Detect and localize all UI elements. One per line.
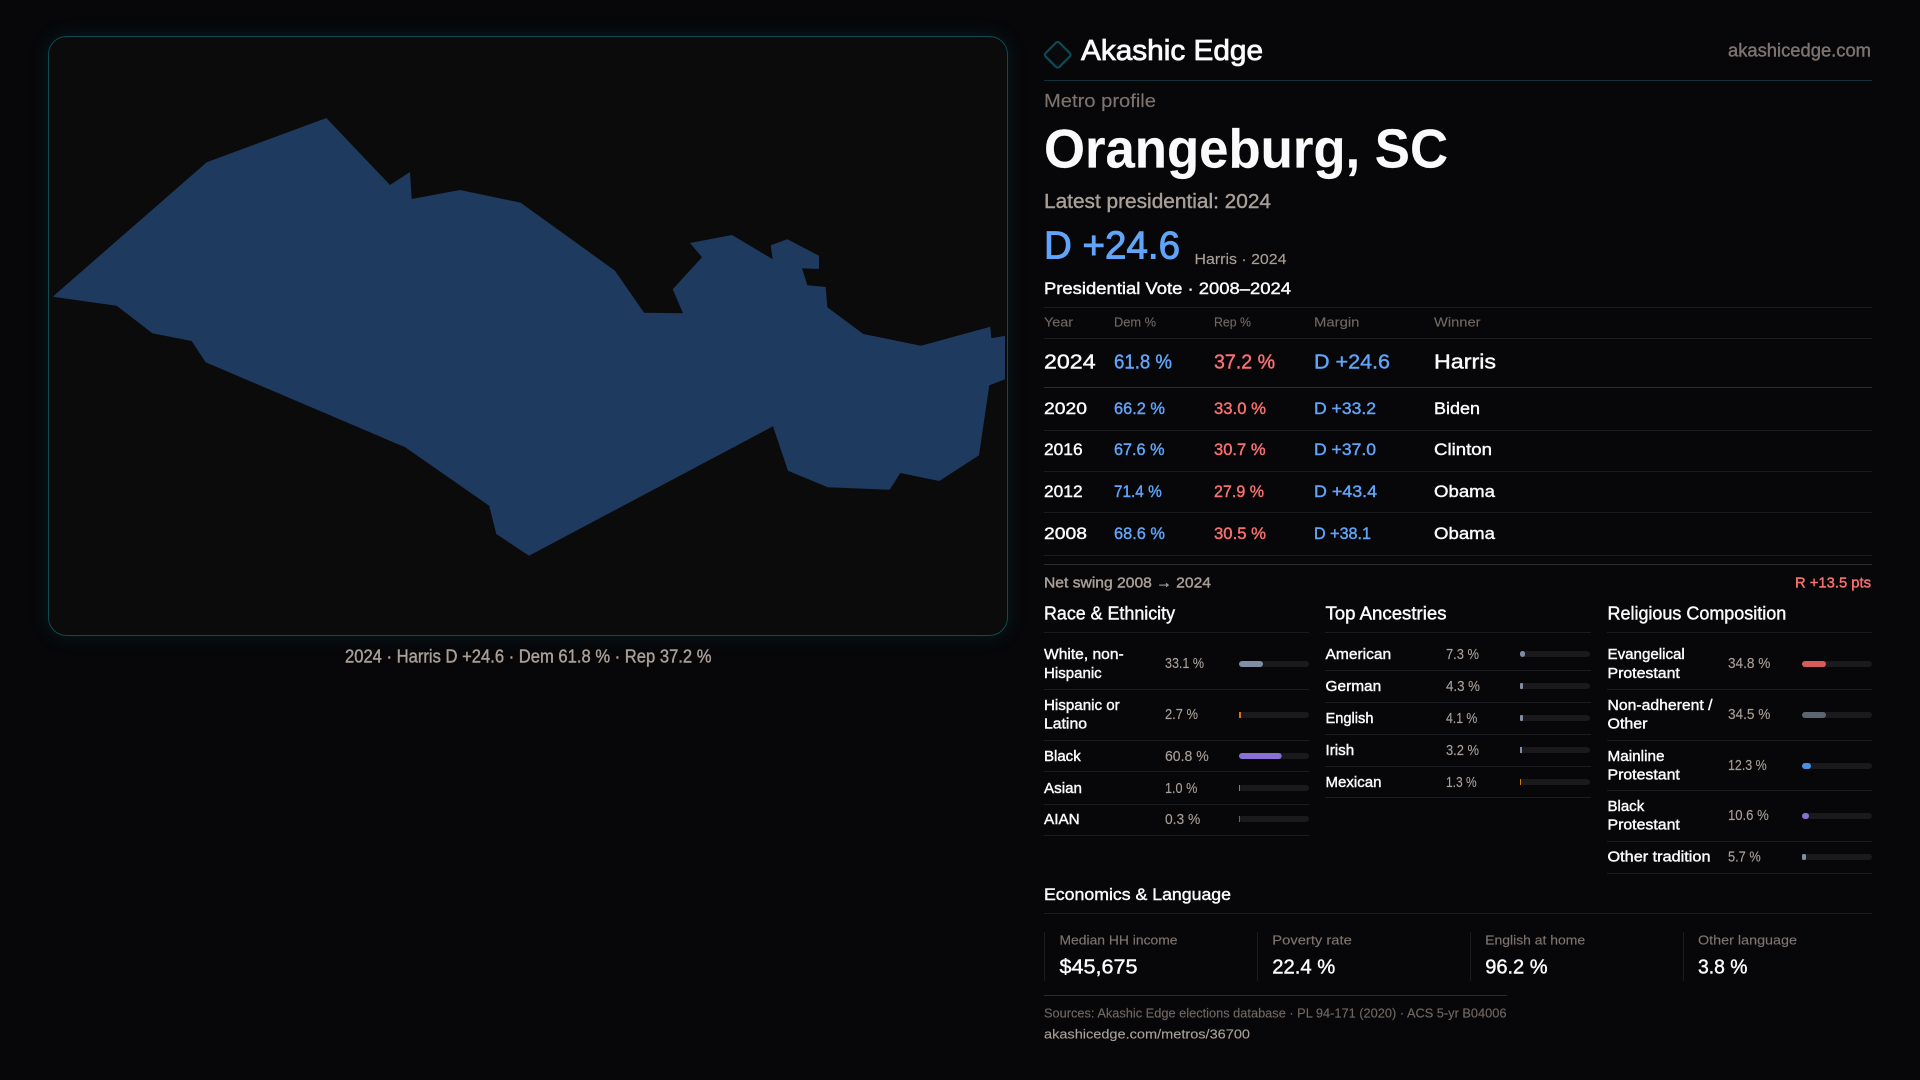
stat: median household income: $45,675 — [1060, 956, 1138, 978]
table: presidential vote — [1044, 307, 1872, 556]
row 2012: 71.4 % — [1114, 482, 1162, 501]
row 2024: Harris — [1434, 351, 1496, 373]
row: Mexican — [1326, 774, 1590, 791]
row: Evangelical Protestant: Protestant — [1608, 665, 1681, 682]
row 2008: 30.5 % — [1214, 524, 1266, 543]
panel: economics and language — [1044, 885, 1872, 981]
row: Non-adherent / Other: Other — [1608, 716, 1648, 733]
row: Hispanic or Latino: Hispanic or — [1044, 697, 1120, 714]
heading: Race & Ethnicity — [1044, 603, 1175, 623]
row: Mainline Protestant: Protestant — [1608, 767, 1681, 784]
row: Irish: Irish — [1326, 742, 1354, 759]
heading: Economics & Language — [1044, 885, 1231, 904]
table heading: Presidential Vote · 2008–2024 — [1044, 279, 1291, 298]
row: Mainline Protestant: Mainline — [1608, 748, 1664, 765]
row 2012: D +43.4 — [1314, 482, 1377, 501]
row 2020 — [1044, 399, 1480, 418]
row: Hispanic or Latino — [1044, 697, 1309, 733]
stat: English at home: 96.2 % — [1485, 956, 1548, 978]
row 2020: 66.2 % — [1114, 399, 1165, 418]
row 2016: 2016 — [1044, 440, 1083, 459]
row: German — [1326, 678, 1590, 695]
row 2012: Obama — [1434, 482, 1496, 501]
heading: Religious Composition — [1608, 603, 1786, 623]
row: English: English — [1326, 710, 1374, 727]
stat: English at home — [1470, 932, 1585, 981]
row: German: German — [1326, 678, 1381, 695]
row 2016 — [1044, 440, 1492, 459]
title: Orangeburg, SC — [1044, 118, 1448, 180]
row 2024: 37.2 % — [1214, 351, 1275, 373]
footer: sources: akashicedge.com/metros/36700 — [1044, 1026, 1250, 1041]
row: Non-adherent / Other: Non-adherent / — [1608, 697, 1713, 714]
row: Hispanic or Latino: 2.7 % — [1165, 706, 1198, 723]
stat: poverty rate: Poverty rate — [1272, 933, 1352, 948]
brand url: akashicedge.com — [1728, 40, 1871, 60]
brand name: Akashic Edge — [1081, 35, 1263, 67]
row 2008: 68.6 % — [1114, 524, 1165, 543]
row: Black Protestant: Protestant — [1608, 817, 1681, 834]
row: Black Protestant — [1608, 798, 1872, 834]
row 2020: D +33.2 — [1314, 399, 1376, 418]
row: Hispanic or Latino: Latino — [1044, 716, 1087, 733]
row: Irish: 3.2 % — [1446, 742, 1479, 759]
table header row: Dem % — [1114, 315, 1156, 330]
row: Irish — [1326, 742, 1590, 759]
net swing row: R +13.5 pts — [1795, 574, 1871, 591]
row: English: 4.1 % — [1446, 710, 1477, 727]
stat: other language: 3.8 % — [1698, 956, 1748, 978]
row: American: American — [1326, 646, 1391, 663]
net swing row: Net swing 2008 → 2024 — [1044, 574, 1211, 591]
row 2008: 2008 — [1044, 524, 1087, 543]
row: AIAN: 0.3 % — [1165, 811, 1200, 828]
row: Asian — [1044, 780, 1309, 797]
row 2024: 2024 — [1044, 351, 1096, 373]
row 2008: Obama — [1434, 524, 1496, 543]
headline margin: D +24.6 — [1044, 225, 1180, 268]
row: Evangelical Protestant: 34.8 % — [1728, 655, 1770, 672]
row 2012 — [1044, 482, 1496, 501]
stat: median household income — [1044, 932, 1178, 981]
row 2024: 61.8 % — [1114, 351, 1172, 373]
map caption: 2024 · Harris D +24.6 · Dem 61.8 % · Rep 37.2 % — [345, 646, 712, 666]
net swing row — [1044, 574, 1871, 591]
stat: other language — [1683, 932, 1797, 981]
panel: top ancestries — [1325, 603, 1591, 798]
row: Black Protestant: Black — [1608, 798, 1645, 815]
row 2020: 2020 — [1044, 399, 1087, 418]
row: Black: Black — [1044, 748, 1081, 765]
headline note: Harris · 2024 — [1194, 251, 1286, 268]
table header row — [1044, 315, 1481, 330]
panel: race and ethnicity — [1044, 603, 1309, 836]
row: Other tradition: 5.7 % — [1728, 849, 1761, 866]
row: American — [1326, 646, 1590, 663]
row: Evangelical Protestant — [1608, 646, 1872, 682]
row 2016: 67.6 % — [1114, 440, 1164, 459]
row: Evangelical Protestant: Evangelical — [1608, 646, 1685, 663]
table header row: Winner — [1434, 315, 1481, 330]
subtitle: latest presidential: Latest presidential: 2024 — [1044, 191, 1271, 213]
stat: poverty rate — [1257, 932, 1352, 981]
row: AIAN: AIAN — [1044, 811, 1080, 828]
heading: Top Ancestries — [1326, 603, 1446, 623]
row: Black — [1044, 748, 1309, 765]
panel: religious composition — [1607, 603, 1872, 874]
row: AIAN — [1044, 811, 1309, 828]
row: Mexican: Mexican — [1326, 774, 1382, 791]
row: Other tradition — [1608, 849, 1872, 866]
headline margin — [1044, 225, 1286, 268]
row: Non-adherent / Other: 34.5 % — [1728, 706, 1770, 723]
row 2024 — [1044, 351, 1496, 373]
stat: English at home: English at home — [1485, 933, 1585, 948]
stat: other language: Other language — [1698, 933, 1797, 948]
row 2016: Clinton — [1434, 440, 1492, 459]
row: English — [1326, 710, 1590, 727]
row: Asian: 1.0 % — [1165, 780, 1197, 797]
row: Mainline Protestant — [1608, 748, 1872, 784]
stat: median household income: Median HH income — [1060, 933, 1178, 948]
table header row: Year — [1044, 315, 1074, 330]
row 2016: 30.7 % — [1214, 440, 1266, 459]
row: Mainline Protestant: 12.3 % — [1728, 757, 1767, 774]
row 2008: D +38.1 — [1314, 524, 1371, 543]
row: White, non-Hispanic — [1044, 646, 1309, 682]
row 2008 — [1044, 524, 1496, 543]
icon: diamond logo — [1044, 41, 1071, 69]
row 2012: 2012 — [1044, 482, 1083, 501]
footer: sources: Sources: Akashic Edge elections database · PL 94-171 (2020) · ACS 5-yr B04006 — [1044, 1006, 1507, 1020]
row 2020: Biden — [1434, 399, 1480, 418]
row: Black Protestant: 10.6 % — [1728, 807, 1769, 824]
stat: poverty rate: 22.4 % — [1272, 956, 1336, 978]
row: White, non-Hispanic: Hispanic — [1044, 665, 1102, 682]
row 2016: D +37.0 — [1314, 440, 1376, 459]
header: brand — [1044, 35, 1871, 69]
row 2012: 27.9 % — [1214, 482, 1264, 501]
panel: map — [48, 36, 1008, 636]
table header row: Rep % — [1214, 315, 1251, 330]
row: German: 4.3 % — [1446, 678, 1480, 695]
map: Orangeburg metro shape — [53, 118, 1005, 556]
row: Black: 60.8 % — [1165, 748, 1209, 765]
row: Asian: Asian — [1044, 780, 1082, 797]
row 2020: 33.0 % — [1214, 399, 1266, 418]
row: Mexican: 1.3 % — [1446, 774, 1477, 791]
row: American: 7.3 % — [1446, 646, 1479, 663]
eyebrow: metro profile: Metro profile — [1044, 91, 1156, 111]
table header row: Margin — [1314, 315, 1359, 330]
row: White, non-Hispanic: 33.1 % — [1165, 655, 1204, 672]
row: Non-adherent / Other — [1608, 697, 1872, 733]
row: White, non-Hispanic: White, non- — [1044, 646, 1124, 663]
row 2024: D +24.6 — [1314, 351, 1390, 373]
footer: sources — [1044, 995, 1507, 1041]
row: Other tradition: Other tradition — [1608, 849, 1710, 866]
